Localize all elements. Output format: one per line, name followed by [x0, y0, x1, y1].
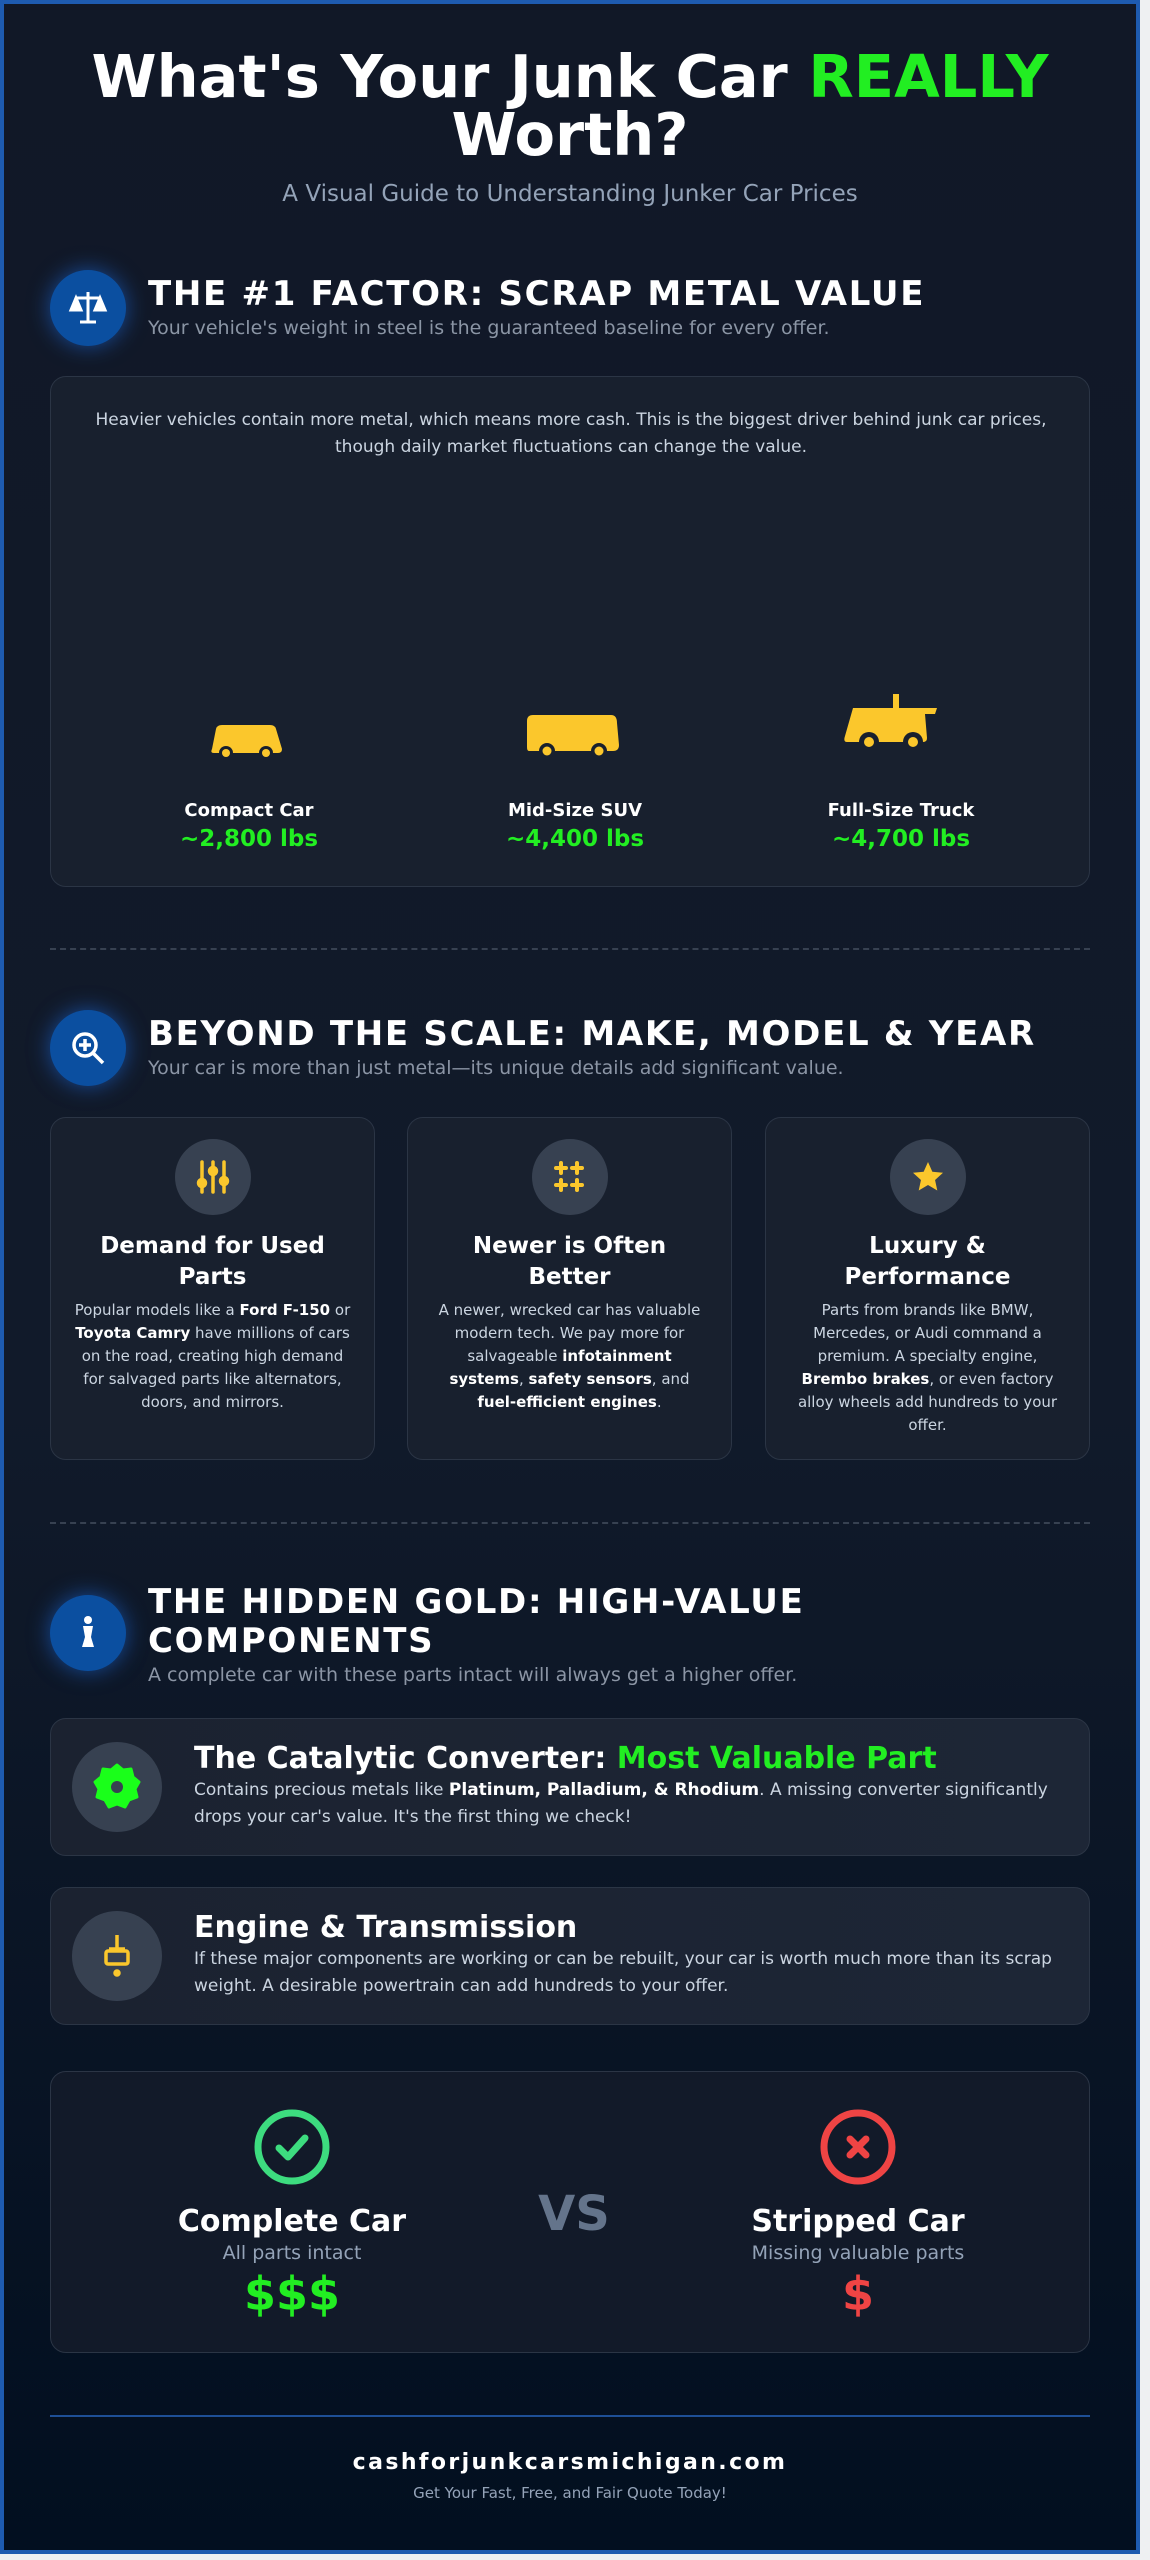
card: newer: A newer, wrecked car has valuable modern tech. We pay more for salvageable infotainment systems, safety sensors, and fuel-efficient engines. — [439, 1301, 700, 1411]
component: catalytic converter — [50, 1718, 1090, 1856]
icon: suv — [527, 715, 619, 756]
label: suv: Mid-Size SUV — [508, 800, 642, 821]
component: catalytic converter: The Catalytic Converter: Most Valuable Part — [194, 1741, 937, 1776]
card: demand: Demand for Used Parts — [100, 1233, 325, 1290]
stripped car — [751, 2110, 965, 2321]
component: engine — [50, 1887, 1090, 2025]
title: Worth? — [451, 100, 689, 169]
heading: beyond the scale: BEYOND THE SCALE: MAKE, MODEL & YEAR — [148, 1014, 1036, 1054]
card: demand — [50, 1117, 375, 1460]
label: compact: ~2,800 lbs — [180, 826, 318, 852]
footer: Get Your Fast, Free, and Fair Quote Today! — [413, 2484, 727, 2502]
subheading: Your vehicle's weight in steel is the guaranteed baseline for every offer. — [148, 317, 830, 339]
icon: converter — [72, 1742, 162, 1832]
subtitle: A Visual Guide to Understanding Junker Car Prices — [282, 181, 858, 207]
card: luxury — [765, 1117, 1090, 1460]
icon: compact car — [211, 725, 282, 757]
subheading: Your car is more than just metal—its unique details add significant value. — [148, 1057, 844, 1079]
panel: weights — [50, 376, 1090, 887]
icon: cross — [820, 2110, 896, 2184]
title — [92, 42, 1049, 169]
label: compact: Compact Car — [184, 800, 314, 821]
card: luxury: Parts from brands like BMW, Mercedes, or Audi command a premium. A specialty engine, Brembo brakes, or even factory alloy wheels add hundreds to your offer. — [798, 1301, 1057, 1434]
label: suv — [506, 800, 644, 852]
label: truck: Full-Size Truck — [828, 800, 974, 821]
complete car: Complete Car — [178, 2204, 406, 2239]
card: newer — [407, 1117, 732, 1460]
icon: star — [890, 1139, 966, 1215]
footer — [353, 2450, 787, 2502]
subheading: A complete car with these parts intact will always get a higher offer. — [148, 1664, 797, 1686]
complete car: $$$ — [244, 2267, 340, 2321]
title: What's Your Junk Car REALLY — [92, 42, 1048, 111]
icon: engine — [72, 1911, 162, 2001]
complete car — [178, 2110, 406, 2321]
component: engine: Engine & Transmission — [194, 1910, 577, 1945]
label: compact — [180, 800, 318, 852]
panel: complete vs stripped — [50, 2071, 1090, 2353]
label: truck — [828, 800, 975, 852]
card: newer: Newer is Often Better — [473, 1233, 666, 1290]
icon: check — [254, 2110, 330, 2184]
icon: gold — [50, 1595, 126, 1671]
icon: scales — [50, 270, 126, 346]
icon: sparkles — [532, 1139, 608, 1215]
icon: magnifier — [50, 1010, 126, 1086]
complete car: All parts intact — [223, 2242, 361, 2264]
stripped car: $ — [842, 2267, 874, 2321]
card: demand: Popular models like a Ford F-150 or Toyota Camry have millions of cars on the road, creating high demand for salvaged parts like alternators, doors, and mirrors. — [75, 1301, 350, 1411]
label: suv: ~4,400 lbs — [506, 826, 644, 852]
heading: hidden gold: THE HIDDEN GOLD: HIGH-VALUE COMPONENTS — [148, 1582, 805, 1661]
component: catalytic converter: Contains precious metals like Platinum, Palladium, & Rhodium. A missing converter significantly drops your car's value. It's the first thing we check! — [194, 1780, 1048, 1827]
label: truck: ~4,700 lbs — [832, 826, 970, 852]
heading: scrap metal: THE #1 FACTOR: SCRAP METAL VALUE — [148, 274, 925, 314]
footer: cashforjunkcarsmichigan.com — [353, 2450, 787, 2475]
card: luxury: Luxury & Performance — [844, 1233, 1011, 1290]
vs: VS — [538, 2186, 610, 2242]
icon: sliders — [174, 1139, 250, 1215]
stripped car: Missing valuable parts — [752, 2242, 964, 2264]
stripped car: Stripped Car — [751, 2204, 965, 2239]
panel text: Heavier vehicles contain more metal, which means more cash. This is the biggest driver behind junk car prices, though daily market fluctuations can change the value. — [95, 410, 1046, 457]
icon: truck — [844, 694, 937, 747]
component: engine: If these major components are working or can be rebuilt, your car is worth much more than its scrap weight. A desirable powertrain can add hundreds to your offer. — [194, 1949, 1052, 1996]
